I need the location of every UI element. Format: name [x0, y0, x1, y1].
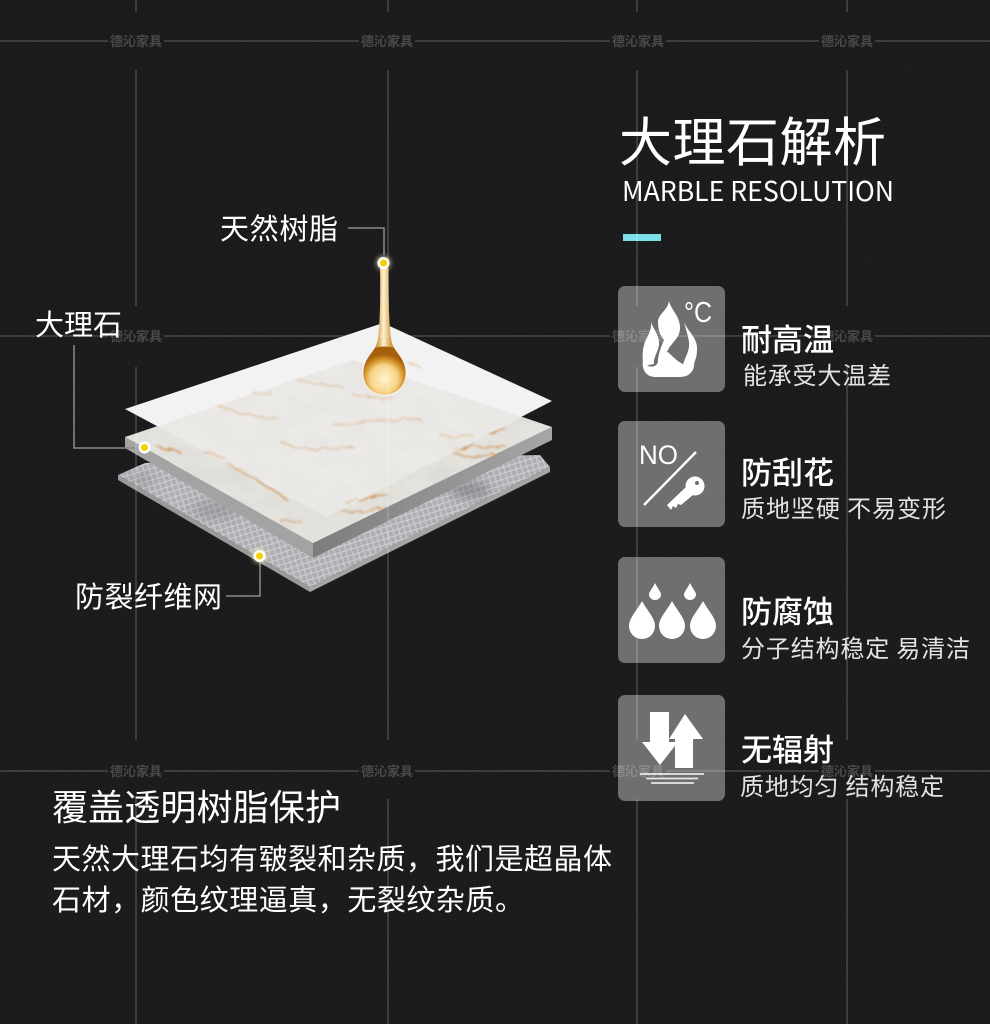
illustration: marble layers [118, 268, 555, 592]
watermarks: 德沁家具 [612, 761, 664, 780]
icon: no key [618, 421, 725, 527]
feature: corrosion resistant: 防腐蚀 [741, 587, 834, 632]
watermarks [110, 31, 873, 780]
icon: water drops [618, 557, 725, 663]
label: anti-crack fiber mesh: 防裂纤维网 [75, 574, 222, 616]
feature: no radiation [618, 695, 944, 802]
watermarks: 德沁家具 [821, 761, 873, 780]
watermarks: 德沁家具 [361, 31, 413, 50]
feature: corrosion resistant [618, 557, 970, 664]
fiber mesh layer [118, 455, 550, 592]
feature: corrosion resistant: 分子结构稳定 易清洁 [741, 629, 970, 664]
resin protection text block: 石材，颜色纹理逼真，无裂纹杂质。 [52, 877, 524, 919]
label: natural resin: 天然树脂 [220, 206, 338, 248]
watermarks: 德沁家具 [110, 326, 162, 345]
icon: no key: NO [639, 440, 678, 470]
title [619, 101, 894, 209]
feature: scratch resistant [618, 421, 946, 527]
accent bar [623, 234, 661, 241]
label: anti-crack fiber mesh [75, 549, 266, 616]
watermarks: 德沁家具 [821, 31, 873, 50]
resin protection text block [52, 779, 612, 919]
feature: heat resistant [618, 286, 891, 392]
feature: no radiation: 质地均匀 结构稳定 [740, 767, 944, 802]
title: MARBLE RESOLUTION [622, 170, 894, 209]
feature: heat resistant: 耐高温 [741, 315, 834, 360]
label: natural resin [220, 206, 390, 270]
icon: flame [618, 286, 725, 392]
watermarks: 德沁家具 [110, 31, 162, 50]
label: marble [35, 302, 150, 454]
feature: scratch resistant: 质地坚硬 不易变形 [741, 489, 946, 524]
icon: flame: °C [684, 297, 712, 329]
watermarks: 德沁家具 [361, 761, 413, 780]
feature: heat resistant: 能承受大温差 [743, 356, 891, 391]
watermarks: 德沁家具 [612, 31, 664, 50]
marble slab [120, 355, 555, 558]
resin protection text block: 天然大理石均有皲裂和杂质，我们是超晶体 [52, 836, 612, 878]
resin drop [363, 268, 406, 395]
icon: arrows [618, 695, 725, 801]
feature: no radiation: 无辐射 [741, 725, 834, 770]
label: marble: 大理石 [35, 302, 122, 344]
title: 大理石解析 [619, 101, 886, 177]
watermarks: 德沁家具 [612, 326, 664, 345]
watermarks: 德沁家具 [110, 761, 162, 780]
resin protection text block: 覆盖透明树脂保护 [52, 779, 341, 831]
feature: scratch resistant: 防刮花 [741, 448, 834, 493]
watermarks: 德沁家具 [821, 326, 873, 345]
transparent resin film [125, 324, 552, 517]
